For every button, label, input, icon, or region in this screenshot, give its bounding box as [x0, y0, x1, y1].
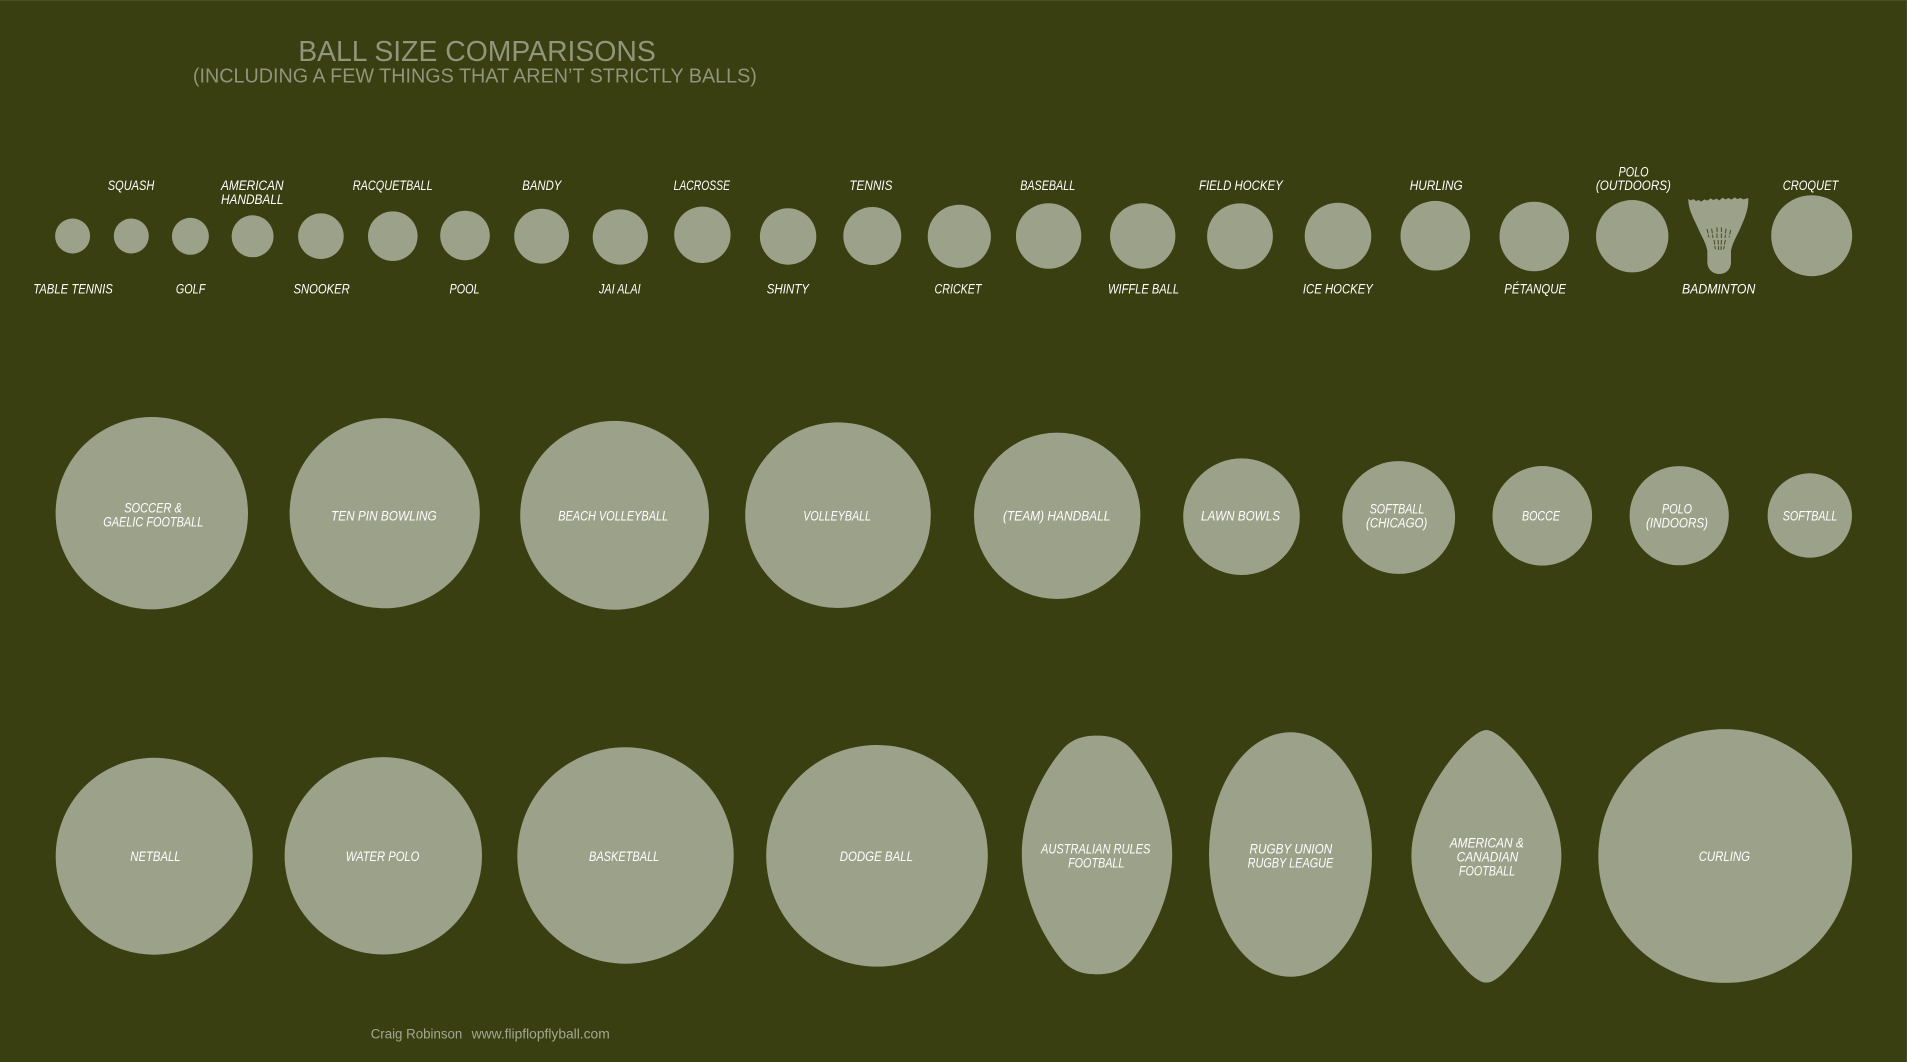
ball: softball [1768, 473, 1852, 558]
ball: polo indoors: POLO [1662, 501, 1692, 516]
ball: soccer and gaelic football [56, 417, 248, 609]
ball: snooker [294, 213, 350, 296]
ball: polo outdoors [1596, 164, 1671, 272]
ball: netball: NETBALL [130, 849, 181, 864]
ball: hurling [1400, 178, 1470, 270]
ball: bocce [1492, 466, 1592, 566]
title: BALL SIZE COMPARISONS [298, 36, 656, 68]
ball: shinty: SHINTY [767, 281, 810, 296]
ball: snooker: SNOOKER [294, 281, 350, 296]
ball: volleyball: VOLLEYBALL [803, 508, 871, 523]
ball: curling [1598, 729, 1852, 983]
ball: polo outdoors: POLO [1618, 164, 1649, 179]
credit: www.flipflopflyball.com [471, 1026, 610, 1041]
ball: american handball: AMERICAN [220, 178, 284, 193]
ball: american handball [220, 178, 284, 257]
ball: softball chicago: SOFTBALL [1370, 501, 1424, 516]
ball: rugby union and rugby league: RUGBY LEAGUE [1248, 856, 1334, 871]
ball: bandy [514, 178, 569, 264]
ball: ten pin bowling: TEN PIN BOWLING [331, 508, 437, 523]
ball: polo indoors: (INDOORS) [1646, 515, 1708, 530]
ball: pool [440, 211, 490, 296]
ball: water polo [285, 757, 482, 954]
ball: baseball [1016, 178, 1081, 269]
ball: australian rules football: FOOTBALL [1068, 856, 1124, 871]
ball: shinty [760, 208, 816, 296]
ball: racquetball: RACQUETBALL [353, 178, 433, 193]
ball: squash: SQUASH [108, 178, 155, 193]
ball: basketball [517, 747, 734, 964]
ball: american and canadian football: FOOTBALL [1459, 863, 1515, 878]
ball: golf [172, 218, 209, 296]
ball: beach volleyball: BEACH VOLLEYBALL [558, 508, 668, 523]
panel: medium balls row [56, 417, 1852, 610]
ball: american handball: HANDBALL [221, 192, 284, 207]
ball: rugby union and rugby league [1209, 732, 1372, 977]
ball: team handball: (TEAM) HANDBALL [1003, 508, 1110, 523]
ball: australian rules football: AUSTRALIAN RULES [1040, 842, 1150, 857]
ball: croquet [1771, 178, 1852, 276]
ball: american and canadian football: CANADIAN [1457, 849, 1518, 864]
ball: petanque: PÉTANQUE [1504, 281, 1567, 296]
ball: racquetball [353, 178, 433, 261]
ball: australian rules football [1022, 736, 1172, 974]
panel: large balls row [56, 729, 1852, 983]
ball: american and canadian football [1411, 730, 1561, 983]
ball: polo indoors [1630, 466, 1729, 565]
ball: petanque [1500, 202, 1569, 296]
ball: soccer and gaelic football: SOCCER & [124, 501, 182, 516]
ball: croquet: CROQUET [1783, 178, 1840, 193]
ball: soccer and gaelic football: GAELIC FOOTBALL [103, 515, 203, 530]
ball: lacrosse [674, 178, 731, 263]
ball: beach volleyball [520, 421, 709, 610]
ball: table tennis: TABLE TENNIS [33, 281, 113, 296]
ball: lawn bowls [1183, 458, 1300, 575]
ball: hurling: HURLING [1410, 178, 1463, 193]
ball: table tennis [33, 218, 113, 296]
ball: wiffle ball: WIFFLE BALL [1108, 281, 1179, 296]
ball: cricket [928, 205, 991, 296]
ball: rugby union and rugby league: RUGBY UNION [1250, 842, 1332, 857]
ball: squash [108, 178, 155, 254]
ball: basketball: BASKETBALL [589, 849, 659, 864]
ball: ten pin bowling [290, 418, 480, 608]
ball: tennis: TENNIS [849, 178, 892, 193]
ball: team handball [974, 433, 1140, 599]
ball: ice hockey: ICE HOCKEY [1303, 281, 1374, 296]
ball: softball chicago: (CHICAGO) [1366, 515, 1427, 530]
title [193, 36, 757, 88]
ball: baseball: BASEBALL [1020, 178, 1075, 193]
ball: bandy: BANDY [522, 178, 562, 193]
icon: badminton shuttlecock [1682, 197, 1756, 296]
ball: water polo: WATER POLO [346, 849, 420, 864]
ball: wiffle ball [1108, 203, 1179, 296]
ball: tennis [843, 178, 901, 265]
ball: softball: SOFTBALL [1783, 508, 1837, 523]
ball: golf: GOLF [176, 281, 206, 296]
ball: netball [56, 758, 253, 955]
credit [371, 1026, 610, 1041]
ball: lawn bowls: LAWN BOWLS [1201, 508, 1280, 523]
ball: jai alai: JAI ALAI [598, 281, 641, 296]
ball: field hockey [1199, 178, 1284, 269]
ball: ice hockey [1303, 203, 1374, 296]
ball: lacrosse: LACROSSE [674, 178, 731, 193]
icon: badminton shuttlecock: BADMINTON [1682, 281, 1756, 296]
ball: pool: POOL [450, 281, 480, 296]
ball: dodge ball: DODGE BALL [840, 849, 913, 864]
ball: softball chicago [1342, 461, 1455, 574]
ball: polo outdoors: (OUTDOORS) [1596, 178, 1671, 193]
credit: Craig Robinson [371, 1026, 462, 1041]
panel: small balls row [33, 164, 1852, 296]
ball: american and canadian football: AMERICAN & [1449, 835, 1524, 850]
ball: curling: CURLING [1699, 849, 1750, 864]
ball: field hockey: FIELD HOCKEY [1199, 178, 1284, 193]
ball: dodge ball [766, 745, 988, 967]
ball: volleyball [745, 422, 931, 608]
ball: jai alai [593, 209, 648, 296]
title: (INCLUDING A FEW THINGS THAT AREN’T STRICTLY BALLS) [193, 66, 757, 88]
ball: bocce: BOCCE [1522, 508, 1561, 523]
ball: cricket: CRICKET [934, 281, 983, 296]
